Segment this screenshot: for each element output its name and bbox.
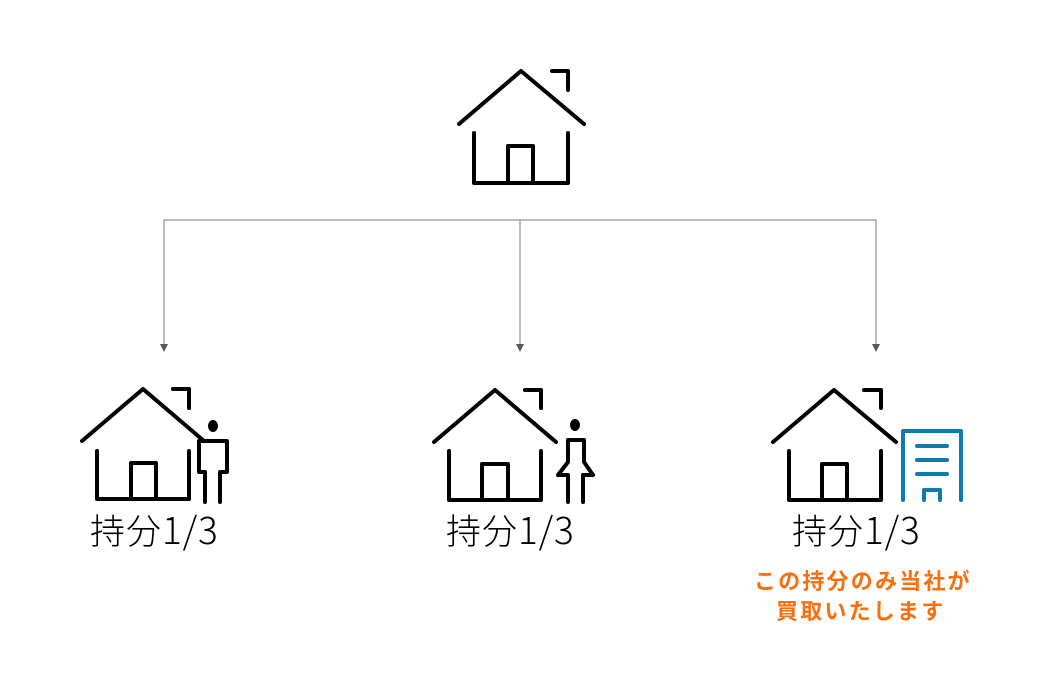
building bbox=[903, 431, 961, 500]
icon: house with company building bbox=[773, 390, 961, 500]
callout: orange note: この持分のみ当社が bbox=[754, 564, 972, 596]
callout: orange note: 買取いたします bbox=[776, 594, 945, 626]
callout: orange note bbox=[754, 564, 972, 626]
arrow: left bbox=[160, 344, 168, 352]
icon: top house bbox=[459, 71, 584, 183]
arrow: centre bbox=[516, 344, 524, 352]
label: share 2: 持分1/3 bbox=[446, 501, 575, 555]
icon: house with woman bbox=[434, 390, 593, 502]
label: share 1: 持分1/3 bbox=[90, 501, 219, 555]
icon: house with man bbox=[82, 389, 227, 502]
label: share 3: 持分1/3 bbox=[792, 501, 921, 555]
house bbox=[773, 390, 896, 500]
tree connector with arrows bbox=[160, 220, 880, 352]
arrow: right bbox=[872, 344, 880, 352]
